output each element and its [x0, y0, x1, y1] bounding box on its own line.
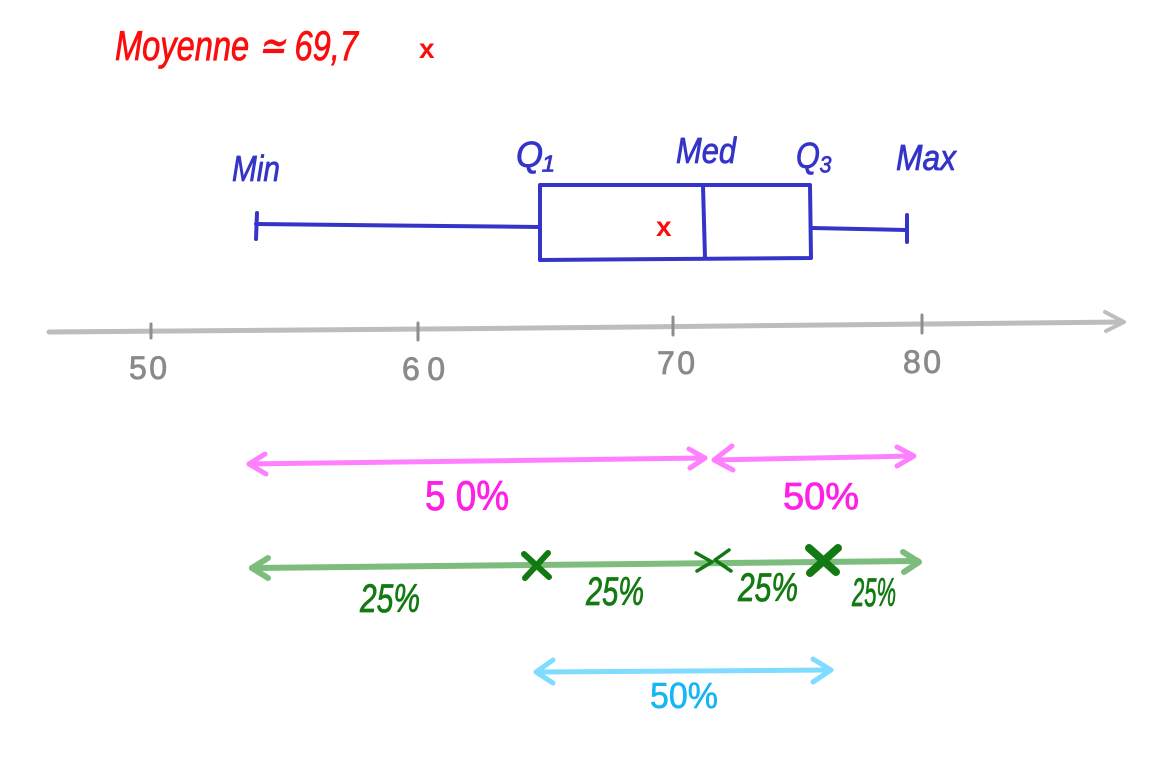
mean marker on box plot: x: [656, 211, 672, 242]
light blue arrow: central 50%: [536, 659, 831, 716]
pink arrows: 50% / 50%: [249, 446, 914, 519]
box plot labels: [232, 130, 958, 189]
title: mean value: Moyenne ≃ 69,7: [115, 22, 359, 69]
green arrow: quartiles 25% each: 25%: [851, 571, 896, 615]
green arrow: quartiles 25% each: 25%: [359, 577, 420, 621]
pink arrows: 50% / 50%: 50%: [783, 476, 859, 518]
number axis: 50: [129, 350, 167, 386]
box plot labels: Q₃: [796, 135, 832, 176]
green arrow: quartiles 25% each: 25%: [737, 566, 798, 610]
number axis: 80: [903, 344, 941, 380]
box plot labels: Q₁: [516, 134, 554, 175]
pink arrows: 50% / 50%: 5 0%: [425, 472, 509, 519]
box plot labels: Max: [896, 137, 958, 178]
number axis: [49, 312, 1124, 387]
number axis: 60: [402, 351, 445, 387]
box plot: [256, 185, 907, 260]
box plot labels: Med: [676, 130, 737, 171]
green arrow: quartiles 25% each: [252, 548, 919, 621]
title: mean value: x: [419, 33, 435, 64]
number axis: 70: [657, 345, 695, 381]
light blue arrow: central 50%: 50%: [650, 675, 718, 716]
box plot labels: Min: [232, 148, 280, 189]
green arrow: quartiles 25% each: 25%: [585, 570, 644, 614]
